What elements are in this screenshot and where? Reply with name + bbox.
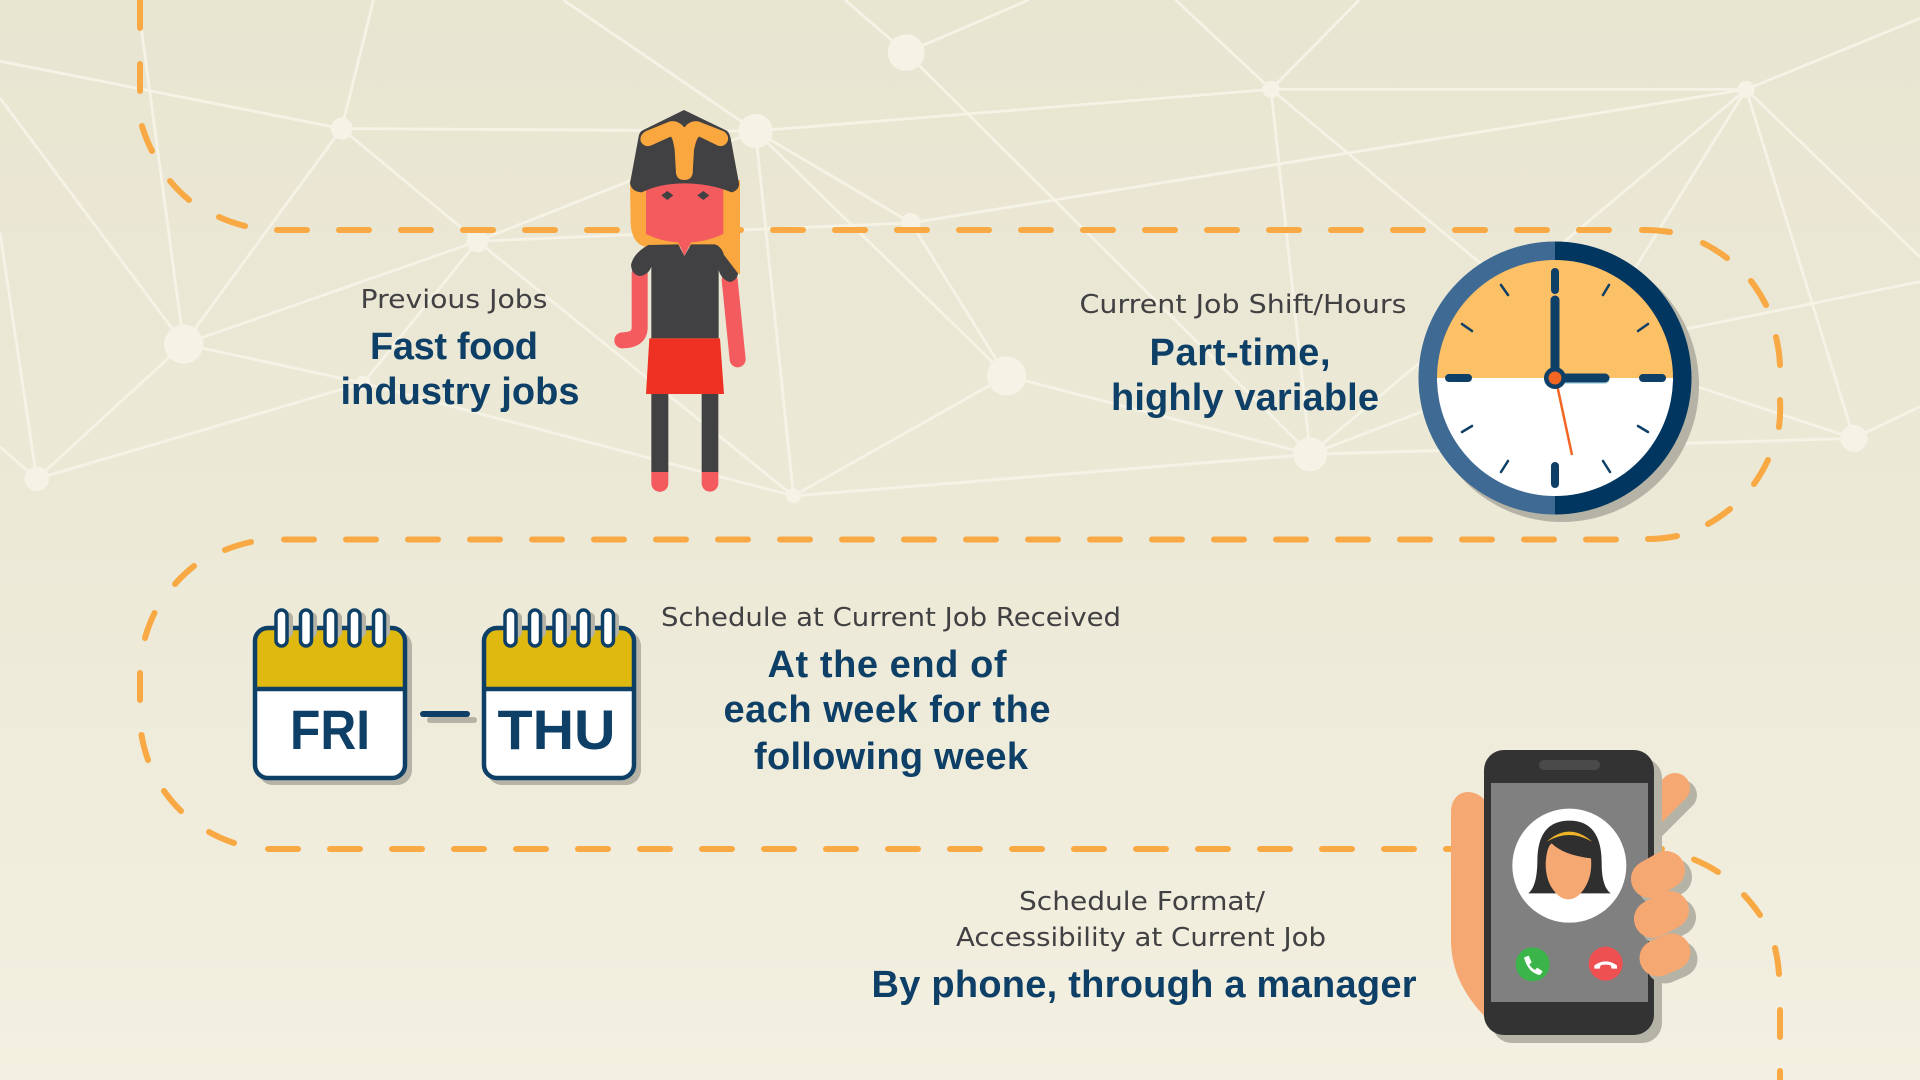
skirt xyxy=(646,338,724,394)
icon: woman character xyxy=(622,110,740,492)
eyes xyxy=(661,191,709,200)
hat xyxy=(630,110,739,192)
phone body xyxy=(1484,750,1654,1035)
text: previous jobs: industry jobs xyxy=(340,371,580,413)
text: schedule format: By phone, through a manager xyxy=(872,964,1417,1006)
icon: calendar THU xyxy=(484,610,641,785)
hair xyxy=(630,180,740,274)
text: schedule received: following week xyxy=(754,736,1029,778)
text: schedule format: Accessibility at Current Job xyxy=(956,923,1326,953)
icon: clock xyxy=(1418,242,1699,522)
fingers xyxy=(1650,870,1672,958)
clock hands xyxy=(1566,375,1605,384)
text: current job shift: Current Job Shift/Hours xyxy=(1080,290,1406,320)
decline button xyxy=(1589,947,1623,981)
answer button xyxy=(1516,947,1550,981)
binder rings xyxy=(509,612,619,638)
phone shadow xyxy=(1492,758,1662,1043)
legs xyxy=(651,394,718,473)
thumb behind phone xyxy=(1647,795,1682,830)
hour ticks xyxy=(1449,272,1662,484)
icon: calendar FRI xyxy=(255,610,412,785)
face xyxy=(646,183,723,256)
text: previous jobs: Previous Jobs xyxy=(360,285,548,315)
network pattern xyxy=(0,0,1920,503)
hat ornament xyxy=(640,121,728,180)
palm xyxy=(1451,792,1490,1022)
text: previous jobs xyxy=(340,285,580,413)
phone speaker xyxy=(1539,760,1600,770)
clock face xyxy=(1437,260,1673,378)
text: previous jobs: Fast food xyxy=(370,326,538,368)
arms xyxy=(622,273,738,359)
phone screen xyxy=(1491,783,1648,1002)
torso and shoulders xyxy=(631,244,738,338)
label THU: THU xyxy=(498,698,616,761)
contact avatar xyxy=(1512,809,1626,923)
text: schedule received: each week for the xyxy=(724,689,1050,731)
label FRI: FRI xyxy=(290,698,370,761)
icon: hand holding phone xyxy=(1451,750,1682,1043)
text: current job shift: highly variable xyxy=(1111,377,1379,419)
text: schedule received xyxy=(661,603,1121,778)
dash between calendars xyxy=(423,714,474,720)
text: current job shift: Part-time, xyxy=(1150,332,1330,374)
clock ring xyxy=(1418,242,1555,514)
text: schedule received: At the end of xyxy=(768,644,1007,686)
text: schedule format: Schedule Format/ xyxy=(1019,887,1265,917)
text: schedule format xyxy=(872,887,1417,1006)
text: current job shift xyxy=(1080,290,1406,419)
finger shadows xyxy=(1657,877,1679,965)
feet xyxy=(651,472,718,492)
binder rings xyxy=(280,612,390,638)
text: schedule received: Schedule at Current Job Received xyxy=(661,603,1121,633)
